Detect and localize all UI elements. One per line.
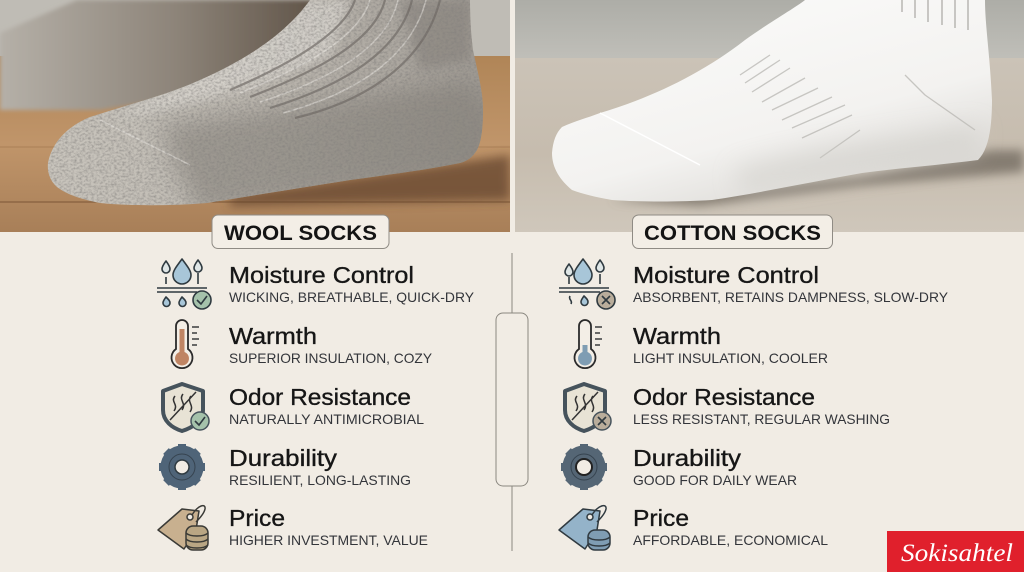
icon: odor shield cross (565, 384, 611, 431)
label: warmth: Warmth (633, 323, 721, 349)
label: price: HIGHER INVESTMENT, VALUE (229, 532, 428, 548)
icon: durability gear (159, 444, 205, 490)
heading: wool socks (212, 215, 389, 248)
label: warmth: SUPERIOR INSULATION, COZY (229, 350, 433, 366)
label: warmth (633, 323, 828, 366)
panel: wool attributes (157, 259, 475, 550)
label: moisture control: Moisture Control (229, 262, 414, 288)
logo: Sokisahtel: Sokisahtel (901, 540, 1013, 567)
label: moisture control: WICKING, BREATHABLE, QUICK-DRY (229, 289, 475, 305)
label: moisture control: Moisture Control (633, 262, 819, 288)
panel: wool socks photo (0, 0, 510, 232)
label: odor resistance: LESS RESISTANT, REGULAR WASHING (633, 411, 890, 427)
icon: warm thermometer (172, 320, 199, 368)
label: odor resistance: Odor Resistance (229, 384, 411, 410)
label: price: Price (633, 505, 689, 531)
label: odor resistance: NATURALLY ANTIMICROBIAL (229, 411, 424, 427)
blurred back sock (0, 0, 320, 110)
label: durability: Durability (633, 445, 742, 471)
heading: cotton socks: COTTON SOCKS (644, 222, 821, 245)
wool sock (40, 0, 500, 215)
label: odor resistance: Odor Resistance (633, 384, 815, 410)
heading: wool socks: WOOL SOCKS (224, 222, 377, 245)
icon: durability gear (561, 444, 607, 490)
icon: cool thermometer (574, 320, 602, 368)
icon: price tag and coins (559, 506, 610, 550)
label: price: AFFORDABLE, ECONOMICAL (633, 532, 828, 548)
label: odor resistance (633, 384, 890, 427)
label: price (229, 505, 428, 548)
label: durability: Durability (229, 445, 338, 471)
cotton sock (552, 0, 992, 202)
heading: cotton socks (632, 215, 832, 248)
label: warmth: Warmth (229, 323, 317, 349)
logo: Sokisahtel (887, 531, 1024, 572)
label: moisture control (633, 262, 949, 305)
label: durability: GOOD FOR DAILY WEAR (633, 472, 797, 488)
label: warmth: LIGHT INSULATION, COOLER (633, 350, 828, 366)
label: price (633, 505, 828, 548)
label: durability: RESILIENT, LONG-LASTING (229, 472, 411, 488)
label: durability (633, 445, 797, 488)
icon: odor shield check (163, 384, 209, 431)
label: durability (229, 445, 411, 488)
label: warmth (229, 323, 433, 366)
label: moisture control: ABSORBENT, RETAINS DAMPNESS, SLOW-DRY (633, 289, 949, 305)
icon: moisture retained cross (559, 259, 615, 309)
icon: price tag and coins (158, 506, 208, 550)
icon: moisture wicking check (157, 259, 211, 309)
panel: cotton attributes (559, 259, 949, 550)
label: price: Price (229, 505, 285, 531)
panel: cotton socks photo (515, 0, 1024, 232)
label: moisture control (229, 262, 475, 305)
center divider (496, 253, 528, 551)
label: odor resistance (229, 384, 424, 427)
